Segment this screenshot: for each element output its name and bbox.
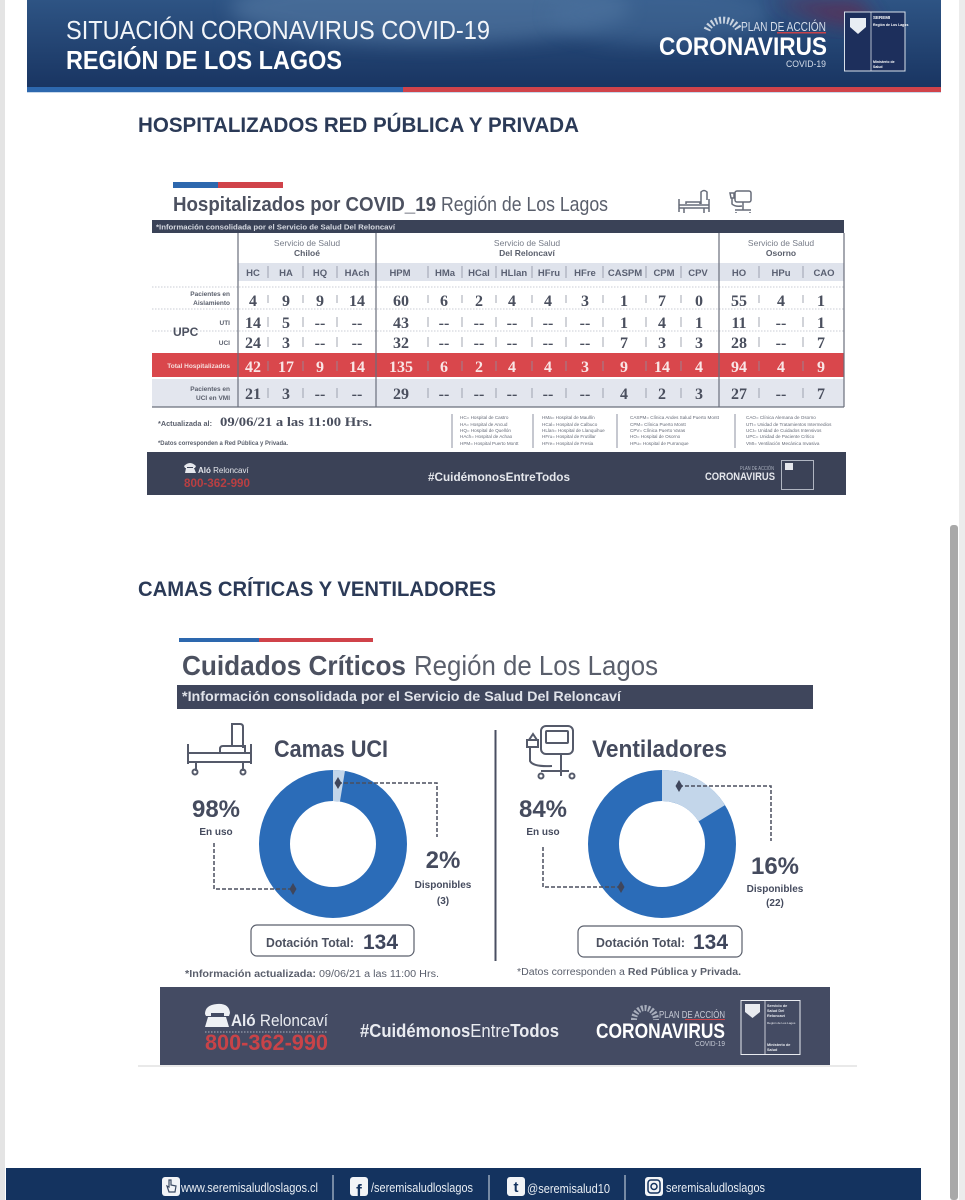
logo: plan de acción coronavirus [596, 1008, 725, 1048]
logo: servicio de salud: Salud Del [767, 1009, 784, 1013]
logo: plan de acción coronavirus: PLAN DE ACCIÓN [659, 1008, 725, 1021]
info band [177, 685, 813, 709]
column header band [238, 263, 844, 281]
callout: 16% disponibles: Disponibles [747, 884, 804, 895]
row labels: Pacientes en [190, 291, 230, 298]
row: pacientes en uci en vmi: -- [352, 386, 362, 403]
tumblr link [507, 1177, 610, 1196]
service headers: Del Reloncaví [499, 248, 556, 258]
table footer band: CORONAVIRUS [705, 471, 775, 483]
row: total hospitalizados: 9 [316, 359, 324, 376]
total box: ventiladores: Dotación Total: [596, 935, 685, 950]
row: uti: -- [580, 315, 590, 332]
abbreviations legend: UTI= Unidad de Tratamientos Intermedios [746, 422, 832, 427]
row: uci [245, 335, 825, 352]
row: pacientes en uci en vmi: -- [474, 386, 484, 403]
callout: 84% en uso [519, 796, 624, 893]
row labels: Aislamiento [193, 300, 230, 307]
note: información actualizada: *Información actualizada: 09/06/21 a las 11:00 Hrs. [185, 969, 439, 980]
tumblr link: @seremisalud10 [527, 1181, 610, 1196]
row: total hospitalizados: 3 [581, 359, 589, 376]
row: pacientes en aislamiento: 9 [282, 293, 290, 310]
row: uci: -- [543, 335, 553, 352]
callout: 98% en uso: En uso [199, 827, 233, 838]
row: pacientes en uci en vmi: 29 [393, 386, 409, 403]
donut chart: ventiladores [604, 786, 720, 902]
row: uti: 1 [620, 315, 628, 332]
row labels: Pacientes en [190, 386, 230, 393]
callout: 84% en uso: En uso [526, 827, 560, 838]
helpline [205, 1011, 328, 1055]
callout: 2% disponibles: 2% [426, 847, 460, 874]
abbreviations legend: CASPM= Clínica Andes Salud Puerto Montt [630, 415, 720, 420]
row: pacientes en uci en vmi: 4 [620, 386, 628, 403]
header title: REGIÓN DE LOS LAGOS [66, 45, 342, 75]
scrollbar [950, 525, 958, 1200]
row: uti: 4 [658, 315, 666, 332]
header logo: seremi box [844, 12, 908, 71]
row: pacientes en uci en vmi: 2 [658, 386, 666, 403]
abbreviations legend: UCI= Unidad de Cuidados Intensivos [746, 428, 822, 433]
row: uci: 28 [731, 335, 747, 352]
row: uci: 24 [245, 335, 261, 352]
abbreviations legend: UPC= Unidad de Paciente Crítico [746, 434, 815, 439]
row: total hospitalizados: 135 [389, 359, 413, 376]
row: uci: 32 [393, 335, 409, 352]
row labels [167, 291, 230, 402]
abbreviations legend: HC= Hospital de Castro [460, 415, 509, 420]
column codes: HA [279, 268, 293, 279]
callout: 84% en uso: 84% [519, 796, 567, 823]
row: pacientes en uci en vmi: -- [776, 386, 786, 403]
row: uti: -- [352, 315, 362, 332]
row: pacientes en uci en vmi: 3 [695, 386, 703, 403]
row: uci: -- [580, 335, 590, 352]
row: uti: -- [507, 315, 517, 332]
abbreviations legend: HAch= Hospital de Achao [460, 434, 513, 439]
row: pacientes en aislamiento: 6 [440, 293, 448, 310]
callout: 98% en uso [192, 796, 296, 895]
row: total hospitalizados: 9 [620, 359, 628, 376]
logo: servicio de salud: Salud [767, 1048, 778, 1052]
row: uti [245, 315, 825, 332]
section heading: hospitalizados: HOSPITALIZADOS RED PÚBLICA Y PRIVADA [138, 113, 579, 137]
total box: camas uci [251, 925, 414, 956]
row: pacientes en uci en vmi: 27 [731, 386, 747, 403]
row: uci: -- [776, 335, 786, 352]
logo: servicio de salud [741, 1000, 800, 1055]
abbreviations legend: CPM= Clínica Puerto Montt [630, 422, 687, 427]
hashtag: #CuidémonosEntreTodos [360, 1021, 559, 1041]
row labels: UPC [173, 325, 199, 339]
logo: servicio de salud: Reloncaví [767, 1014, 786, 1018]
row: uti: -- [776, 315, 786, 332]
row: pacientes en uci en vmi: -- [580, 386, 590, 403]
header logo: plan de acción coronavirus: COVID-19 [786, 59, 826, 69]
row: pacientes en aislamiento: 4 [508, 293, 516, 310]
service headers: Servicio de Salud [748, 238, 814, 248]
footer band: cuidados críticos [160, 987, 830, 1065]
icon: ventilator [730, 191, 751, 213]
accent stripe [173, 182, 283, 188]
column codes: HMa [435, 268, 456, 279]
header logo: seremi box: Ministerio de [873, 60, 895, 64]
helpline: 800-362-990 [205, 1030, 328, 1055]
row: pacientes en aislamiento: 60 [393, 293, 409, 310]
row: total hospitalizados: 4 [777, 359, 785, 376]
row: uci: -- [315, 335, 325, 352]
row: uci: -- [439, 335, 449, 352]
header logo: seremi box: SEREMI [873, 15, 890, 20]
update note: 09/06/21 a las 11:00 Hrs. [220, 414, 372, 429]
row: uci: 7 [620, 335, 628, 352]
row: uti: 43 [393, 315, 409, 332]
logo: servicio de salud: Región de Los Lagos [767, 1021, 796, 1025]
service headers: Osorno [766, 248, 796, 258]
row: pacientes en aislamiento: 7 [658, 293, 666, 310]
row: uti: -- [474, 315, 484, 332]
panel title: Cuidados Críticos [182, 650, 406, 681]
row: uci: 3 [695, 335, 703, 352]
header logo: plan de acción coronavirus: CORONAVIRUS [659, 33, 827, 61]
page footer bar [6, 1168, 921, 1200]
row: uti: -- [439, 315, 449, 332]
panel title [182, 650, 658, 681]
panel: cuidados críticos [138, 638, 857, 1066]
row: pacientes en aislamiento: 4 [249, 293, 257, 310]
instagram link [645, 1177, 765, 1196]
row: total hospitalizados: 42 [245, 359, 261, 376]
row: pacientes en aislamiento: 9 [316, 293, 324, 310]
icon: ventilator [527, 726, 574, 778]
service headers [274, 238, 814, 258]
row: total hospitalizados: 94 [731, 359, 747, 376]
table title: Hospitalizados por COVID_19 [173, 194, 436, 216]
logo: plan de acción coronavirus: CORONAVIRUS [596, 1020, 725, 1043]
panel title: Región de Los Lagos [414, 650, 658, 681]
column codes: HFre [574, 268, 596, 279]
header title: SITUACIÓN CORONAVIRUS COVID-19 [66, 15, 490, 45]
column codes: HO [732, 268, 746, 279]
info band: *Información consolidada por el Servicio de Salud Del Reloncaví [156, 222, 396, 232]
abbreviations legend: CPV= Clínica Puerto Varas [630, 428, 686, 433]
instagram link: seremisaludloslagos [666, 1180, 765, 1195]
update note: *Actualizada al: [158, 419, 212, 428]
callout: 98% en uso: 98% [192, 796, 240, 823]
abbreviations legend: CAO= Clínica Alemana de Osorno [746, 415, 816, 420]
total box: ventiladores: 134 [693, 931, 728, 954]
column codes: CPV [688, 268, 708, 279]
column codes: HPM [389, 268, 411, 279]
row: total hospitalizados: 6 [440, 359, 448, 376]
total box: ventiladores [578, 926, 742, 957]
row: uci: -- [474, 335, 484, 352]
helpline: Aló Reloncaví [231, 1011, 328, 1030]
website link [162, 1177, 318, 1196]
info band [152, 220, 844, 233]
service headers: Servicio de Salud [274, 238, 340, 248]
abbreviations legend: HCal= Hospital de Calbuco [542, 422, 598, 427]
total box: camas uci: 134 [363, 931, 398, 954]
abbreviations legend: HQ= Hospital de Quellón [460, 428, 511, 433]
callout: 2% disponibles: (3) [437, 896, 449, 907]
header logo: plan de acción coronavirus: PLAN DE ACCIÓN [741, 19, 826, 34]
row: total hospitalizados: 9 [817, 359, 825, 376]
row: total hospitalizados: 4 [544, 359, 552, 376]
row: uti: 1 [817, 315, 825, 332]
row: pacientes en aislamiento: 14 [349, 293, 365, 310]
abbreviations legend [452, 414, 832, 448]
column codes: CPM [653, 268, 675, 279]
header banner [27, 0, 941, 87]
update note [158, 414, 372, 447]
callout: 16% disponibles: (22) [766, 898, 784, 909]
row: uci: 7 [817, 335, 825, 352]
row: total hospitalizados: 14 [349, 359, 365, 376]
header logo: seremi box: Salud [873, 65, 883, 69]
row: uti: -- [543, 315, 553, 332]
row: total hospitalizados: 17 [278, 359, 294, 376]
abbreviations legend: HMa= Hospital de Maullín [542, 415, 595, 420]
row: pacientes en uci en vmi: -- [543, 386, 553, 403]
abbreviations legend: HFru= Hospital de Frutillar [542, 434, 596, 439]
column codes: HLlan [501, 268, 527, 279]
row: uti: 1 [695, 315, 703, 332]
column codes: HC [246, 268, 260, 279]
header logo: seremi box: Región de Los Lagos [873, 23, 908, 27]
row: pacientes en uci en vmi: -- [315, 386, 325, 403]
abbreviations legend: HO= Hospital de Osorno [630, 434, 681, 439]
callout: 16% disponibles [676, 780, 804, 909]
row: total hospitalizados [245, 359, 825, 376]
service headers: Chiloé [294, 248, 320, 258]
row: pacientes en aislamiento: 0 [695, 293, 703, 310]
table footer band: PLAN DE ACCIÓN [740, 465, 774, 472]
abbreviations legend: HA= Hospital de Ancud [460, 422, 508, 427]
total box: camas uci: Dotación Total: [266, 935, 354, 950]
service headers: Servicio de Salud [494, 238, 560, 248]
row: uci: -- [507, 335, 517, 352]
callout: 16% disponibles: 16% [751, 853, 799, 880]
row: uci: 3 [658, 335, 666, 352]
row: pacientes en uci en vmi [245, 386, 825, 403]
website link: www.seremisaludloslagos.cl [180, 1180, 318, 1195]
column codes [246, 268, 835, 279]
row labels: Total Hospitalizados [167, 363, 230, 370]
heading: ventiladores: Ventiladores [592, 736, 727, 763]
row: uci: -- [352, 335, 362, 352]
column codes: HQ [313, 268, 327, 279]
heading: camas uci: Camas UCI [274, 736, 388, 763]
logo: plan de acción coronavirus: COVID-19 [695, 1041, 725, 1048]
row: pacientes en uci en vmi: 3 [282, 386, 290, 403]
row: pacientes en aislamiento [249, 293, 825, 310]
row: pacientes en aislamiento: 4 [544, 293, 552, 310]
icon: telephone [205, 1004, 230, 1027]
row labels: UTI [220, 320, 230, 327]
row labels: UCI en VMI [196, 395, 230, 402]
table title: Región de Los Lagos [441, 194, 608, 216]
row: uci: 3 [282, 335, 290, 352]
header title [66, 15, 490, 75]
column codes: HPu [772, 268, 791, 279]
info band: *Información consolidada por el Servicio de Salud Del Reloncaví [182, 689, 622, 704]
row: pacientes en aislamiento: 4 [777, 293, 785, 310]
column codes: CASPM [608, 268, 642, 279]
row: total hospitalizados: 14 [654, 359, 670, 376]
donut chart: camas uci [274, 786, 392, 902]
note: datos corresponden: *Datos corresponden a Red Pública y Privada. [517, 967, 741, 978]
logo: servicio de salud: Ministerio de [767, 1043, 790, 1047]
facebook link: f [356, 1181, 362, 1200]
abbreviations legend: HPu= Hospital de Purranque [630, 441, 689, 446]
header stripe [27, 87, 941, 93]
abbreviations legend: VMI= Ventilación Mecánica Invasiva [746, 441, 820, 446]
column codes: CAO [813, 268, 835, 279]
abbreviations legend: HPM= Hospital Puerto Montt [460, 441, 519, 446]
table footer band: 800-362-990 [184, 476, 250, 490]
panel: hospitalizados table [147, 182, 846, 495]
row: total hospitalizados: 2 [475, 359, 483, 376]
table footer band: #CuidémonosEntreTodos [428, 470, 570, 484]
row: uti: -- [315, 315, 325, 332]
table footer band: Aló Reloncaví [198, 466, 249, 475]
icon: hospital bed [679, 190, 709, 213]
facebook link: /seremisaludloslagos [371, 1180, 473, 1195]
facebook link [350, 1177, 473, 1200]
tumblr link: t [514, 1179, 518, 1196]
row: pacientes en uci en vmi: -- [507, 386, 517, 403]
row: pacientes en aislamiento: 3 [581, 293, 589, 310]
column codes: HCal [468, 268, 490, 279]
abbreviations legend: HLlan= Hospital de Llanquihue [542, 428, 605, 433]
logo: servicio de salud: Servicio de [767, 1004, 787, 1008]
row labels: UCI [219, 340, 230, 347]
accent stripe [179, 638, 373, 642]
row: pacientes en aislamiento: 2 [475, 293, 483, 310]
row: uti: 5 [282, 315, 290, 332]
column codes: HFru [538, 268, 560, 279]
row: total hospitalizados: 4 [508, 359, 516, 376]
header logo: plan de acción coronavirus [659, 19, 827, 69]
section heading: camas críticas: CAMAS CRÍTICAS Y VENTILADORES [138, 578, 496, 601]
table footer band [147, 452, 846, 495]
total row band [152, 353, 844, 377]
row: pacientes en aislamiento: 1 [817, 293, 825, 310]
row: uti: 14 [245, 315, 261, 332]
icon: hospital bed [188, 724, 251, 774]
row: pacientes en uci en vmi: -- [439, 386, 449, 403]
abbreviations legend: HFre= Hospital de Fresia [542, 441, 594, 446]
table title [173, 194, 608, 216]
callout: 2% disponibles [334, 777, 472, 907]
row: pacientes en aislamiento: 55 [731, 293, 747, 310]
callout: 2% disponibles: Disponibles [415, 880, 472, 891]
row: pacientes en uci en vmi: 21 [245, 386, 261, 403]
row: uti: 11 [731, 315, 747, 332]
row: pacientes en uci en vmi: 7 [817, 386, 825, 403]
update note: *Datos corresponden a Red Pública y Privada. [158, 440, 288, 447]
row: total hospitalizados: 4 [695, 359, 703, 376]
column codes: HAch [345, 268, 370, 279]
row: pacientes en aislamiento: 1 [620, 293, 628, 310]
vmi row band [152, 379, 844, 407]
